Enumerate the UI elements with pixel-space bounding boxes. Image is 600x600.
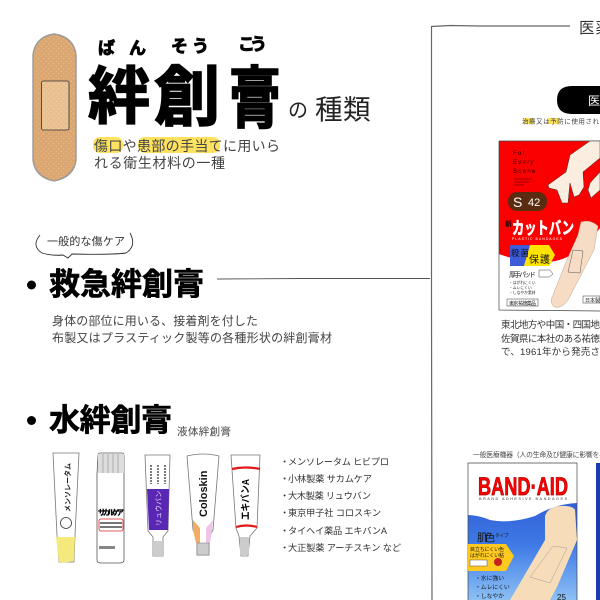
product list: タイヘイ薬品 エキバンA bbox=[288, 525, 388, 536]
feature list bbox=[475, 574, 510, 600]
text: カットバン description: 東北地方や中国・四国地 bbox=[501, 319, 600, 331]
product box: BAND-AID: タイプ bbox=[495, 532, 509, 539]
product box: BAND-AID: 目立ちにくい色 bbox=[470, 546, 504, 553]
bullet bbox=[27, 416, 36, 425]
tube: リュウバン: リュウバン bbox=[155, 491, 163, 526]
heading: 救急絆創膏: 救急絆創膏 bbox=[49, 267, 204, 302]
title furigana: こう bbox=[238, 35, 267, 54]
product box: カットバン: ・しなやか素材 bbox=[509, 290, 536, 295]
product list bbox=[280, 457, 401, 553]
type text: 肌色 bbox=[477, 532, 496, 544]
product list: ・ bbox=[280, 508, 289, 518]
product box: カットバン: 日本製 bbox=[585, 297, 600, 304]
title bbox=[88, 60, 281, 137]
tube: サカムケア: サカルケア bbox=[98, 508, 124, 517]
title furigana: そう bbox=[171, 37, 209, 56]
feature list: ・ムレにくい bbox=[475, 584, 510, 591]
description: 救急絆創膏 bbox=[52, 313, 332, 345]
product list: 大木製薬 リュウバン bbox=[288, 490, 371, 501]
hand illustration bbox=[548, 141, 600, 203]
product box: BAND-AID bbox=[468, 463, 577, 600]
tube: ヒビプロ: メンソレータム bbox=[63, 463, 72, 512]
text: カットバン description: で、1961年から発売さ bbox=[501, 346, 600, 358]
product list: ・ bbox=[280, 457, 289, 467]
product box: カットバン: 42 bbox=[528, 197, 540, 209]
product box: カットバン: 保護 bbox=[529, 253, 550, 266]
bullet bbox=[27, 280, 36, 290]
yellow tag bbox=[468, 544, 514, 571]
title furigana bbox=[98, 35, 267, 58]
feature tags bbox=[510, 245, 530, 266]
description: 救急絆創膏: 身体の部位に用いる、接着剤を付した bbox=[52, 313, 258, 328]
For Every Scene: Scene bbox=[513, 169, 537, 175]
product box: カットバン: カットバン bbox=[512, 219, 574, 238]
definition text with highlights: 傷口や患部の手当てに用いら bbox=[94, 138, 280, 154]
product box: BAND-AID: はがれにくい粘 bbox=[470, 552, 504, 559]
product list: ・ bbox=[280, 526, 289, 536]
For Every Scene: Every bbox=[513, 160, 535, 166]
bandage in box bbox=[551, 221, 598, 307]
title furigana: ばん bbox=[98, 39, 146, 58]
tube: ヒビプロ bbox=[53, 453, 79, 562]
For Every Scene bbox=[513, 151, 537, 175]
tube: Coloskin bbox=[187, 454, 219, 555]
panel frame bbox=[432, 26, 570, 600]
tube: Coloskin: Coloskin bbox=[198, 470, 210, 517]
speech bubble: 一般的な傷ケア: 一般的な傷ケア bbox=[47, 234, 125, 248]
product box: カットバン: 東京 祐徳薬品 bbox=[509, 300, 536, 307]
subtitle: の種類: の bbox=[288, 100, 308, 122]
second product box edge bbox=[596, 463, 600, 600]
description: 救急絆創膏: 布製又はプラスティック製等の各種形状の絆創膏材 bbox=[52, 330, 332, 345]
product box: カットバン: ・はがれにくい bbox=[509, 280, 536, 285]
bandage bbox=[510, 506, 577, 600]
product box: BAND-AID: BRAND ADHESIVE BANDAGES bbox=[479, 497, 567, 501]
tube: エキバンA bbox=[231, 455, 260, 556]
divider line to panel bbox=[217, 278, 430, 280]
size badge bbox=[508, 192, 547, 211]
カットバン logo: 新 bbox=[505, 219, 512, 228]
product points: 厚手パッド bbox=[509, 270, 536, 279]
title: 絆 bbox=[88, 63, 150, 132]
tube: エキバンA: エキバンA bbox=[240, 479, 252, 520]
product box: カットバン: ・ムレにくい bbox=[509, 285, 532, 290]
product list: 大正製薬 アーチスキン など bbox=[288, 542, 401, 553]
For Every Scene: For bbox=[513, 151, 526, 157]
subtitle: の種類 bbox=[288, 94, 370, 125]
title: 膏 bbox=[229, 61, 281, 137]
tube: サカムケア bbox=[97, 453, 124, 563]
feature list: ・水に強い bbox=[475, 574, 504, 582]
icon: bandage illustration bbox=[33, 34, 76, 181]
definition text with highlights: れる衛生材料の一種 bbox=[94, 155, 225, 171]
title: 創 bbox=[154, 60, 220, 134]
speech bubble: 一般的な傷ケア bbox=[36, 233, 133, 258]
black pill heading bbox=[557, 86, 600, 114]
heading: 水絆創膏: 水絆創膏 bbox=[49, 403, 172, 438]
product box: カットバン: S bbox=[513, 194, 522, 210]
subtitle: の種類: 種 bbox=[315, 94, 342, 125]
text: カットバン description bbox=[501, 319, 600, 358]
product box: カットバン: 殺菌 bbox=[511, 248, 529, 258]
product box: カットバン: PLASTIC BANDAGES bbox=[512, 237, 563, 241]
product box: カットバン bbox=[499, 141, 600, 311]
subtitle: の種類: 類 bbox=[343, 94, 370, 125]
product list: 小林製薬 サカムケア bbox=[288, 473, 372, 484]
BAND-AID logo: BAND·AID bbox=[478, 473, 568, 501]
definition text with highlights bbox=[93, 137, 280, 171]
caption: 液体絆創膏: 液体絆創膏 bbox=[177, 425, 231, 438]
product list: メンソレータム ヒビプロ bbox=[288, 457, 389, 467]
product list: ・ bbox=[280, 474, 289, 484]
product list: ・ bbox=[280, 543, 289, 553]
text: カットバン description: 佐賀県に本社のある祐徳 bbox=[501, 333, 600, 345]
product list: ・ bbox=[280, 491, 289, 501]
tube: リュウバン bbox=[145, 455, 170, 556]
product list: 東京甲子社 コロスキン bbox=[288, 507, 381, 518]
feature list: ・しなやか bbox=[475, 592, 504, 600]
